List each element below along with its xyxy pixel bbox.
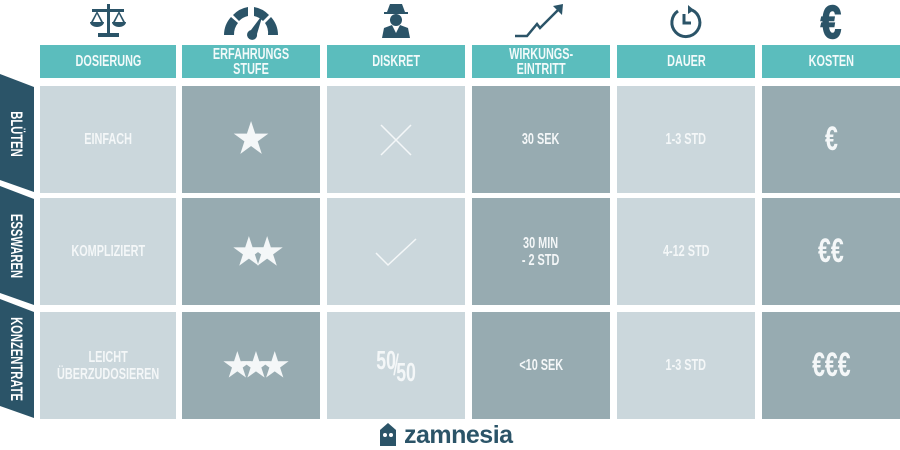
row 3: konzentrate: ÜBERZUDOSIEREN — [57, 366, 159, 382]
header: kosten: KOSTEN — [808, 53, 854, 70]
row tabs: BLÜTEN — [6, 111, 26, 157]
row 2: esswaren: KOMPLIZIERT — [71, 243, 145, 260]
icon: scales — [90, 4, 126, 37]
text: 30 MIN — [523, 234, 559, 252]
text: 1-3 STD — [666, 131, 706, 148]
row tabs: KONZENTRATE — [6, 317, 25, 401]
header: dauer — [617, 45, 755, 78]
text: 30 SEK — [522, 131, 560, 148]
icon: gauge — [224, 7, 278, 40]
text: - 2 STD — [522, 252, 560, 268]
header: erfahrungsstufe: ERFAHRUNGS — [213, 46, 289, 62]
text: <10 SEK — [519, 357, 563, 374]
text: 1-3 STD — [666, 357, 706, 374]
header: wirkungseintritt: WIRKUNGS- — [509, 46, 573, 62]
header: dosierung — [40, 45, 176, 78]
row 3: konzentrate — [40, 312, 176, 419]
row tabs: ESSWAREN — [6, 214, 25, 278]
icon: rising arrow — [515, 4, 563, 38]
text: € — [825, 120, 837, 158]
icon: clock — [670, 5, 702, 38]
text: ★★★ — [223, 347, 279, 383]
header: dosierung: DOSIERUNG — [75, 53, 141, 70]
header: kosten — [762, 45, 900, 78]
header: dauer: DAUER — [667, 53, 705, 70]
text: €€€ — [812, 346, 850, 384]
text: €€ — [818, 232, 844, 270]
logo: zamnesia: zamnesia — [404, 421, 513, 449]
row 1: blüten: EINFACH — [84, 131, 132, 148]
header: diskret: DISKRET — [372, 53, 420, 70]
row 3: konzentrate: LEICHT — [88, 348, 128, 366]
text: ★★ — [233, 231, 269, 272]
header: wirkungseintritt: EINTRITT — [517, 60, 565, 78]
row 1: blüten — [40, 86, 176, 193]
header: erfahrungsstufe — [182, 45, 320, 78]
header: diskret — [327, 45, 465, 78]
text: 50/50 — [376, 344, 416, 386]
header: wirkungseintritt — [472, 45, 610, 78]
header: erfahrungsstufe: STUFE — [233, 60, 269, 78]
icon: spy — [382, 4, 410, 38]
row tabs — [0, 74, 34, 418]
text: 4-12 STD — [663, 243, 709, 260]
row 2: esswaren — [40, 198, 176, 305]
text: ★ — [233, 117, 269, 161]
